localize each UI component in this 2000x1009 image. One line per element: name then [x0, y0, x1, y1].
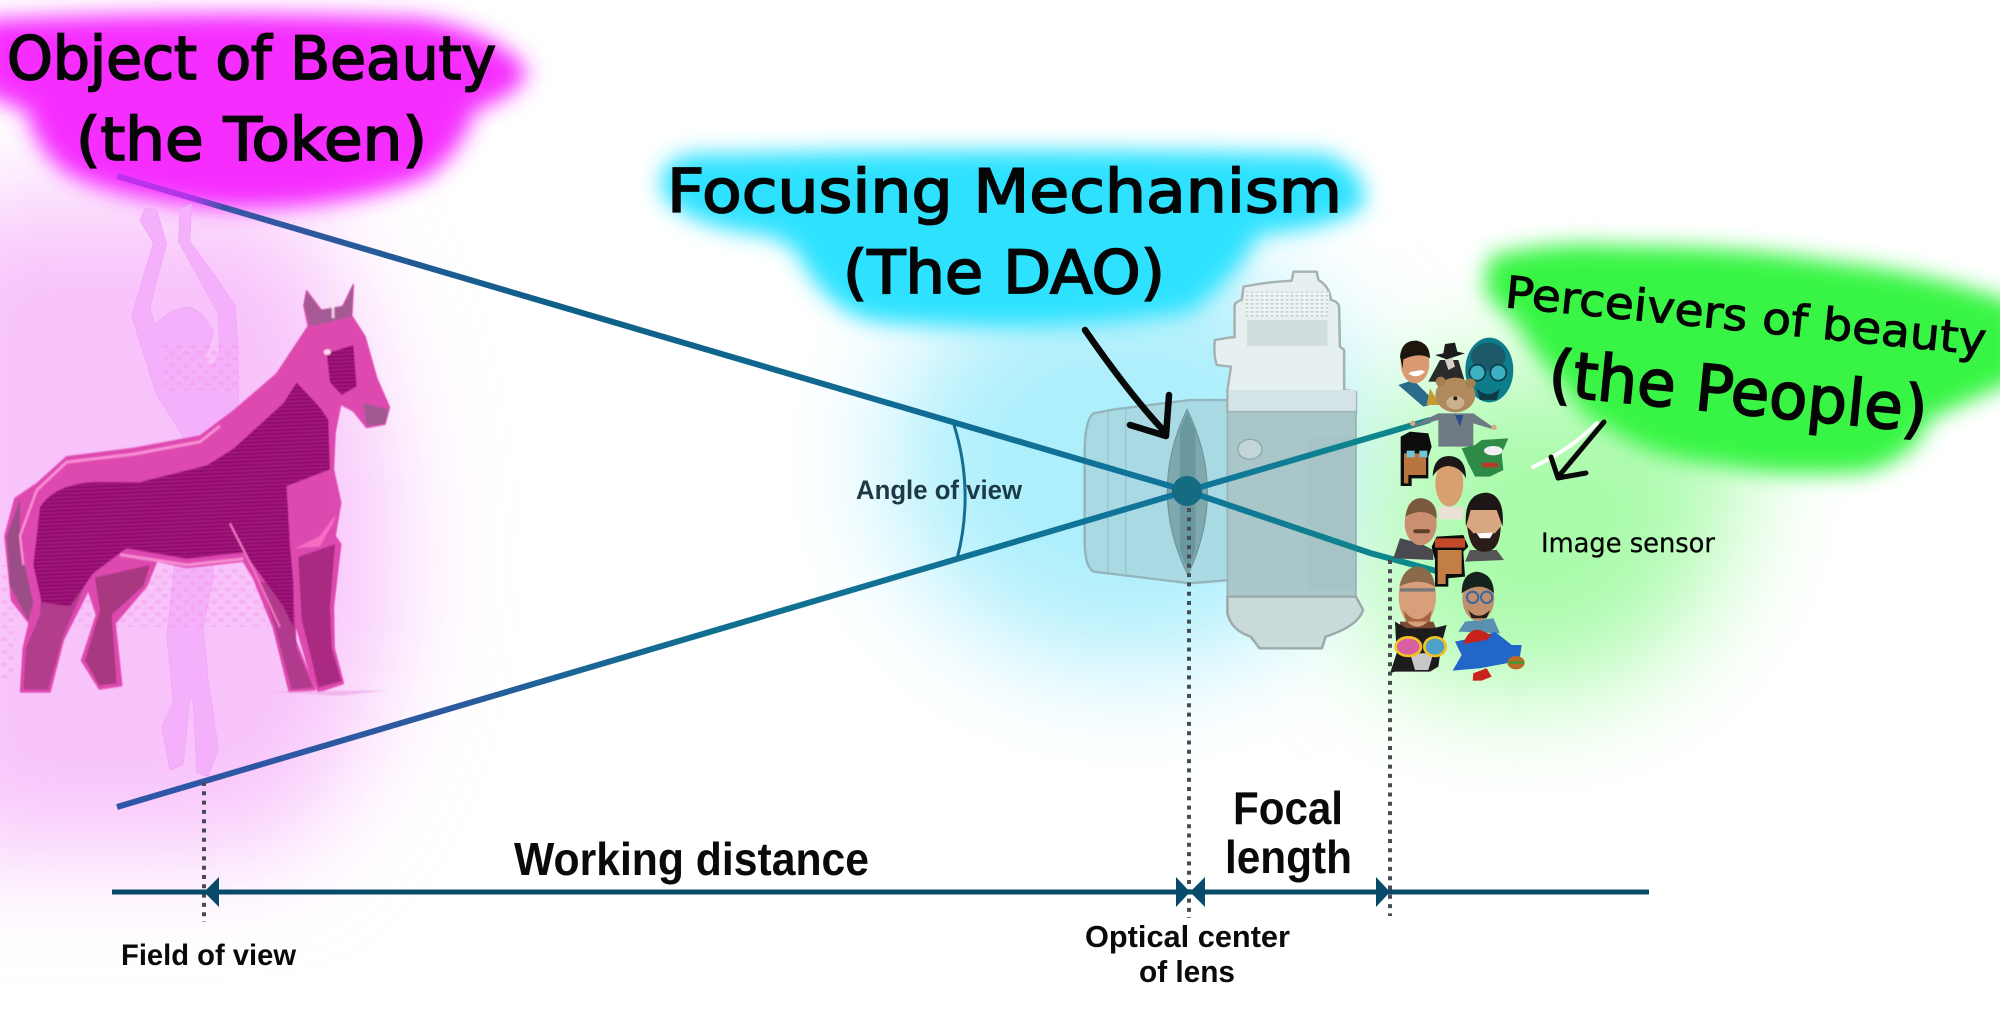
lens element	[1167, 409, 1207, 575]
ground shadow	[267, 690, 388, 696]
unicorn horse token	[5, 270, 389, 696]
title: perceivers of beauty: (the People)	[1545, 337, 1931, 448]
portrait: man with round glasses	[1458, 572, 1500, 633]
camera base	[1227, 597, 1363, 648]
top sight line	[117, 176, 1187, 491]
label: focal length: length	[1225, 831, 1352, 883]
background glow: cyan	[890, 255, 1370, 665]
label: optical center of lens: of lens	[1139, 954, 1235, 989]
dotted guide: image sensor	[1388, 560, 1392, 916]
portrait: bearded man	[1465, 493, 1504, 562]
dial knurling	[1245, 292, 1329, 317]
title: object of beauty: Object of Beauty	[7, 24, 496, 94]
optical center dot	[1172, 476, 1202, 506]
title: object of beauty: (the Token)	[76, 105, 427, 175]
title: focusing mechanism: (The DAO)	[843, 238, 1165, 308]
halftone dots	[0, 345, 270, 681]
camera	[1085, 272, 1363, 648]
portrait: woman	[1433, 456, 1466, 519]
label: focal length: Focal	[1233, 782, 1343, 834]
arrow: to people	[1551, 422, 1604, 478]
angle of view arc	[954, 425, 965, 559]
portrait: man with moustache	[1393, 498, 1437, 560]
label: angle of view: Angle of view	[856, 475, 1023, 505]
title: focusing mechanism	[667, 157, 1342, 308]
line to sensor: lower	[1187, 491, 1440, 572]
portrait: pixel punk with glasses	[1401, 432, 1432, 486]
camera body top plate	[1214, 272, 1356, 413]
horse silhouette	[5, 285, 389, 692]
label: working distance: Working distance	[514, 833, 869, 885]
label: field of view: Field of view	[121, 939, 297, 972]
label: optical center of lens: Optical center	[1085, 919, 1290, 954]
arrowheads	[204, 877, 1390, 907]
heading blob: green	[1484, 244, 2000, 474]
portrait: pixel punk with cap	[1432, 535, 1468, 587]
title: object of beauty	[7, 24, 496, 175]
portrait: blue mask	[1465, 338, 1513, 402]
heading blob: cyan	[662, 150, 1364, 327]
portrait: fedora dog	[1428, 343, 1465, 382]
label: image sensor: Image sensor	[1541, 528, 1716, 559]
white stroke	[1533, 423, 1597, 467]
dark hatched body	[33, 382, 330, 627]
portrait: teddy bear in suit	[1410, 377, 1497, 447]
title: focusing mechanism: Focusing Mechanism	[667, 157, 1342, 227]
title: perceivers of beauty: Perceivers of beauty	[1503, 267, 1989, 366]
dotted guide: optical center	[1187, 508, 1191, 918]
people collage	[1390, 338, 1525, 681]
title: perceivers of beauty	[1503, 267, 1989, 448]
dusky rear legs	[85, 565, 150, 685]
arrow: to lens	[1085, 330, 1169, 436]
light highlights	[20, 426, 220, 565]
head shade and ears	[304, 285, 353, 326]
camera body	[1227, 412, 1356, 597]
line to sensor: upper	[1187, 420, 1430, 491]
distance axis	[112, 890, 1649, 894]
portrait: pepe frog	[1462, 438, 1508, 477]
portrait: cat with glasses	[1390, 622, 1447, 673]
label: optical center of lens	[1085, 919, 1290, 989]
portrait: smiling man	[1398, 341, 1440, 407]
background glow: green	[1370, 367, 1741, 693]
portrait: man with glasses	[1399, 567, 1437, 630]
heading blob: magenta	[0, 13, 528, 208]
ballerina silhouette	[132, 204, 238, 777]
barrel rim shade	[1108, 409, 1126, 573]
label: focal length	[1225, 782, 1352, 883]
avatar: blue cat with burger	[1453, 630, 1525, 681]
background glow: pink	[0, 200, 391, 850]
lens barrel	[1085, 400, 1231, 583]
tail	[7, 499, 33, 621]
body details	[1238, 439, 1262, 459]
bottom sight line	[117, 491, 1187, 807]
dotted guide: field of view	[202, 782, 206, 922]
